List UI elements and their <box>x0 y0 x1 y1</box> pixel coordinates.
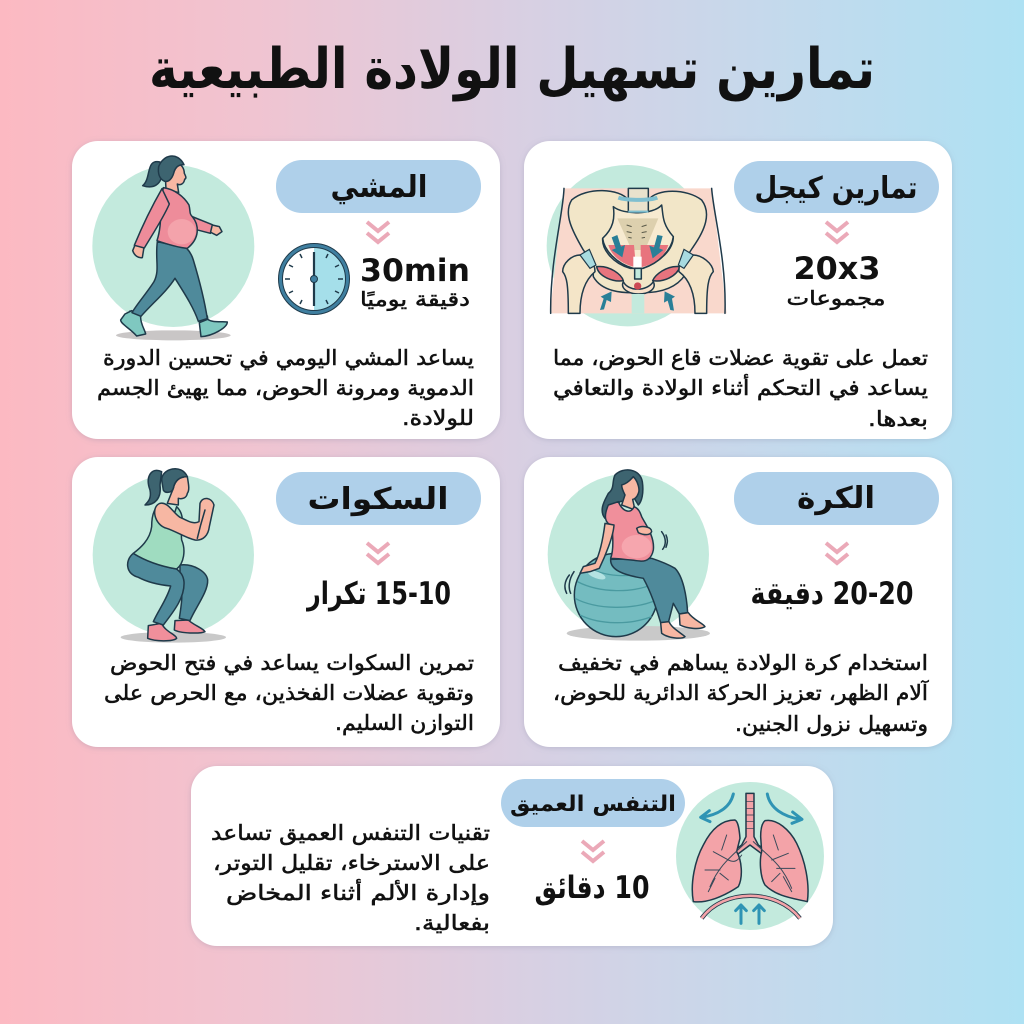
description: التوازن السليم. <box>335 711 474 736</box>
description <box>553 346 928 431</box>
heading pill: التنفس العميق <box>510 792 676 817</box>
icon: squatting woman <box>93 469 254 643</box>
heading pill: السكوات <box>308 482 448 517</box>
stat: 30min: 30min <box>360 253 470 289</box>
description: وتسهيل نزول الجنين. <box>735 712 928 736</box>
description: استخدام كرة الولادة يساهم في تخفيف <box>558 651 928 676</box>
description: يساعد المشي اليومي في تحسين الدورة <box>103 346 474 370</box>
chevron arrow <box>826 543 848 563</box>
icon: woman on ball <box>548 470 710 641</box>
description <box>104 651 474 736</box>
chevron arrow <box>826 222 848 242</box>
description: آلام الظهر، تعزيز الحركة الدائرية للحوض، <box>553 680 929 705</box>
panel: walking <box>72 141 500 439</box>
description <box>553 651 929 736</box>
description <box>97 346 474 430</box>
heading pill <box>501 779 685 827</box>
description: تعمل على تقوية عضلات قاع الحوض، مما <box>553 346 928 370</box>
description: بعدها. <box>868 407 928 431</box>
stat: duration: 10 دقائق <box>534 870 650 906</box>
chevron arrow <box>367 222 389 242</box>
description: تقنيات التنفس العميق تساعد <box>211 821 490 845</box>
stat: 20x3: مجموعات <box>786 286 886 310</box>
description <box>211 821 490 935</box>
panel: squats <box>72 457 500 747</box>
icon: clock <box>278 244 350 314</box>
heading pill <box>734 472 939 525</box>
heading pill: المشي <box>330 170 428 205</box>
heading pill <box>276 160 481 213</box>
description: بفعالية. <box>414 911 490 935</box>
icon: walking pregnant woman <box>92 156 254 340</box>
stat: duration: 20-20 دقيقة <box>750 576 914 612</box>
title: تمارين تسهيل الولادة الطبيعية <box>149 37 875 102</box>
icon: pelvis <box>547 165 727 326</box>
description: وتقوية عضلات الفخذين، مع الحرص على <box>104 681 474 705</box>
heading pill <box>276 472 481 525</box>
panel: deep breathing <box>191 766 833 946</box>
panel: kegel exercises <box>524 141 952 439</box>
heading pill: تمارين كيجل <box>754 171 918 206</box>
stat: 30min <box>360 253 470 311</box>
description: على الاسترخاء، تقليل التوتر، <box>213 851 490 875</box>
description: يساعد في التحكم أثناء الولادة والتعافي <box>553 374 928 401</box>
panel: birth ball <box>524 457 952 747</box>
chevron arrow <box>582 841 604 861</box>
description: للولادة. <box>402 406 474 430</box>
icon: lungs <box>676 782 824 930</box>
description: الدموية ومرونة الحوض، مما يهيئ الجسم <box>97 376 474 401</box>
heading pill <box>734 161 939 213</box>
description: تمرين السكوات يساعد في فتح الحوض <box>110 651 474 675</box>
stat: 20x3: 20x3 <box>794 251 880 287</box>
description: وإدارة الألم أثناء المخاض <box>226 879 490 906</box>
chevron arrow <box>367 543 389 563</box>
heading pill: الكرة <box>797 481 875 516</box>
stat: reps: 15-10 تكرار <box>305 576 451 612</box>
stat: 30min: دقيقة يوميًا <box>360 287 470 311</box>
stat: 20x3 <box>786 251 886 310</box>
